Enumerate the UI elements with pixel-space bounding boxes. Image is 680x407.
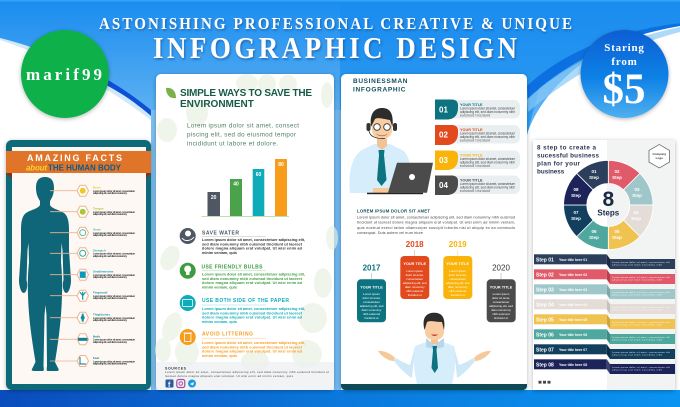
donut chart: 8 steps: Step [631,216,641,221]
text block: tincidunt ut laoreet dolore magna aliquam erat volutpat. Ut wisi enim ad minim veniam, [357,220,515,224]
row 04: 04 [439,181,448,190]
row: stomach: adipiscing elit, sed diam nonummy [93,255,128,258]
row: nails: Lorem ipsum dolor sit amet, consectetuer [93,339,135,342]
card 2018: adipiscing elit, sed [403,281,427,285]
step 06: adipiscing sed diam nonummy nibh [612,339,663,341]
step 06: Lorem ipsum dolor sit amet, consectetuer elit [612,336,670,339]
step 08: Lorem ipsum dolor sit amet, consectetuer elit [612,366,670,369]
social icons: f [168,382,171,389]
card 2017: nibh euismod [363,312,380,316]
row 02 [435,125,520,145]
step 05: Lorem ipsum dolor sit amet, consectetuer elit [612,321,670,324]
row 01: 01 [439,106,448,114]
card 2020: dolor sit amet, [492,296,510,300]
row: tongue: Lorem ipsum dolor sit amet, consectetuer [93,211,135,214]
row 03: 03 [439,156,448,165]
card 2019: adipiscing elit, sed [446,281,470,285]
icon: leaf [166,88,176,98]
bar chart [202,159,289,216]
step 07: Step 07 [536,347,554,353]
row 04: adipiscing elit, sed diam nonummy nibh [460,186,515,190]
step 08 [534,359,675,374]
social icons [166,380,196,389]
card 2018: nibh euismod [406,289,424,293]
row 01 [435,100,520,120]
intro text: incididunt ut labore et dolore. [187,140,278,148]
item: use friendly bulbs: Lorem ipsum dolor sit amet, consectetuer adipiscing elit, [202,272,305,276]
illustration: presenting man [378,313,491,384]
panel heading: SIMPLE WAYS TO SAVE THE [180,88,312,99]
panel: human body facts [6,140,151,390]
card 2019 [443,240,472,299]
text block: quis nostrud exerci tation ullamcorper suscipit lobortis nisl ut aliquip ex ea commodo [357,226,515,230]
row: brain: Lorem ipsum dolor sit amet, consectetuer [93,190,135,193]
row: brain [50,185,135,196]
row: stomach: Lorem ipsum dolor sit amet, consectetuer [93,253,135,256]
card 2018: 2018 [406,240,424,249]
step 01: Your title here 01 [559,258,587,262]
card 2018: consectetuer [406,277,423,281]
card 2018: diam nonummy [405,285,425,289]
donut chart: 8 steps: 03 [634,187,640,192]
list rows [435,100,520,195]
row 02: adipiscing elit, sed diam nonummy nibh [460,135,515,139]
card 2017: Lorem ipsum [363,292,380,296]
row: heart: adipiscing elit, sed diam nonummy [93,234,128,237]
item: use both side of the paper: minim veniam, quis [202,320,237,324]
row: tongue [50,206,135,217]
step 06: Step 06 [536,332,554,338]
step 08: adipiscing sed diam nonummy nibh [612,369,663,371]
donut chart: 8 steps: 01 [591,169,597,174]
panel: save the environment [155,74,338,390]
item: use friendly bulbs [180,263,305,289]
step 04: Your title here 04 [559,303,587,307]
row: nails [50,334,135,345]
step 01: Lorem ipsum dolor sit amet, consectetuer elit [612,261,670,264]
card 2020: YOUR TITLE [490,286,513,290]
row: feet: adipiscing elit, sed diam nonummy [93,362,128,366]
text block: Lorem ipsum dolor sit amet, consectetuer adipiscing elit, sed diam nonummy nibh euismod [357,216,515,220]
row 01: YOUR TITLE [460,103,483,107]
step 02: Step 02 [536,272,554,278]
step 02: Lorem ipsum dolor sit amet, consectetuer elit [612,276,670,279]
row: thighbones: Thighbones [93,313,110,317]
row: feet: Feet [93,356,99,360]
row 04: Lorem ipsum dolor sit amet, consectetuer [460,182,516,186]
item: use friendly bulbs: USE FRIENDLY BULBS [202,264,263,270]
step 02 [534,269,675,284]
step 01: Step 01 [536,257,554,263]
row 04 [435,176,520,195]
badge: starting price circle [580,30,668,118]
intro text: piscing elit, sed do eiusmod tempor [187,132,296,138]
donut chart: 8 steps [564,160,653,250]
bar chart: 80 [278,162,284,168]
header band [6,151,151,179]
sources [165,366,329,378]
card 2019: dolor sit amet, [449,273,467,277]
item: use both side of the paper [180,295,305,324]
row: brain: adipiscing elit, sed diam nonummy [93,192,128,195]
intro text: Lorem ipsum dolor sit amet, consect [187,122,299,130]
footer dots [538,381,550,384]
row: feet [50,356,135,366]
panel heading: business [537,168,565,176]
step 03: Lorem ipsum dolor sit amet, consectetuer elit [612,291,670,294]
sources: laoreet dolore magna aliquam erat volutpat. Ut wisi enim ad minim veniam, quis [165,374,294,378]
step 02: Your title here 02 [559,273,587,277]
row 02: YOUR TITLE [460,128,483,132]
panel heading: 8 step to create a [537,144,596,152]
row: heart [50,227,135,238]
row 01: Lorem ipsum dolor sit amet, consectetuer [460,106,516,110]
card 2020: consectetuer [493,300,509,304]
donut chart: 8 steps: Step [589,235,599,240]
donut chart: 8 steps: 02 [614,169,620,174]
row: fingernail: Lorem ipsum dolor sit amet, consectetuer [93,295,135,298]
item: save water: dolore magna aliquam erat volutpat. Ut wisi enim ad [202,247,303,251]
step list [534,254,675,374]
row 03: adipiscing elit, sed diam nonummy nibh [460,160,515,164]
text block: consequat. Duis autem vel eum iriure [357,231,423,235]
card 2017: diam nonummy [362,308,382,312]
step 01 [534,254,675,269]
row: small intestine: Lorem ipsum dolor sit amet, consectetuer [93,274,135,277]
item: use both side of the paper: sed diam nonummy nibh euismod tincidunt ut laoreet [202,311,303,315]
card 2019: diam nonummy [448,285,468,289]
step 03: adipiscing sed diam nonummy nibh [612,294,663,296]
item: avoid littering: minim veniam, quis [202,354,237,358]
item: avoid littering: dolore magna aliquam erat volutpat. Ut wisi enim ad [202,350,303,354]
card 2019: nibh euismod [449,289,467,293]
card 2017: 2017 [363,264,381,272]
card 2017: consectetuer [363,300,380,304]
icon: company logo hexagon: Logo [656,156,663,160]
row 03: Lorem ipsum dolor sit amet, consectetuer [460,157,516,161]
row: stomach [50,248,135,259]
row: fingernail [50,290,135,301]
bar chart: 60 [256,172,261,178]
card 2020: Lorem ipsum [493,292,510,296]
row 02: 02 [439,130,448,140]
row: nails: Nails [93,334,101,338]
item: save water: SAVE WATER [202,230,239,236]
row: thighbones [50,312,135,323]
item: avoid littering [180,329,305,358]
item: save water: Lorem ipsum dolor sit amet, consectetuer adipiscing elit, [202,238,305,242]
step 05 [534,314,675,329]
step 03: Your title here 03 [559,288,587,292]
badge: starting price circle: $5 [602,66,646,113]
donut chart: 8 steps: 8 [602,188,614,211]
step 08: Your title here 08 [559,363,587,367]
item: use both side of the paper: Lorem ipsum dolor sit amet, consectetuer adipiscing elit, [202,307,305,311]
icon: company logo hexagon: Company [652,152,666,156]
card 2020 [487,264,516,322]
row: tongue: Tongue [93,207,104,211]
donut chart: 8 steps: Step [571,216,581,221]
card 2017: adipiscing elit, sed [360,304,384,308]
step 01: adipiscing sed diam nonummy nibh [612,264,663,266]
donut chart: 8 steps: Step [571,193,581,198]
row: small intestine: adipiscing elit, sed diam nonummy [93,276,128,279]
panel: businessman infographic [341,74,527,390]
panel heading: ENVIRONMENT [180,99,254,110]
timeline [357,240,516,322]
row 01: adipiscing elit, sed diam nonummy nibh [460,110,515,114]
step 04: adipiscing sed diam nonummy nibh [612,309,663,311]
card 2020: 2020 [492,264,510,272]
item: avoid littering: sed diam nonummy nibh euismod tincidunt ut laoreet [202,345,303,349]
row: feet: Lorem ipsum dolor sit amet, consectetuer [93,360,135,363]
card 2018: dolor sit amet, [406,273,424,277]
panel heading: INFOGRAPHIC [353,86,406,94]
badge: starting price circle: from [611,56,638,68]
card 2019: 2019 [449,240,467,249]
card 2017: tincidunt ut [365,316,379,320]
step 07: Your title here 07 [559,348,587,352]
body silhouette [19,177,71,371]
item: avoid littering: Lorem ipsum dolor sit amet, consectetuer adipiscing elit, [202,341,305,345]
donut chart: 8 steps: 04 [633,210,639,215]
row 02: euismod tincidunt [460,138,490,142]
badge: marif99 green circle: marif99 [26,65,102,84]
donut chart: 8 steps: 07 [573,210,579,215]
card 2019: Lorem ipsum [449,269,467,273]
bar chart: 40 [233,182,239,188]
row: heart: Lorem ipsum dolor sit amet, consectetuer [93,232,135,235]
card 2020: nibh euismod [492,312,510,316]
row 04: YOUR TITLE [460,178,483,182]
step 02: adipiscing sed diam nonummy nibh [612,279,663,281]
text block [357,208,515,235]
header band: THE HUMAN BODY [48,164,122,172]
bar chart: 20 [211,195,217,201]
card 2017 [357,264,386,322]
item: avoid littering: AVOID LITTERING [202,332,253,338]
item: save water: minim veniam, quis [202,251,237,255]
row: thighbones: Lorem ipsum dolor sit amet, consectetuer [93,317,135,320]
donut chart: 8 steps: 08 [573,187,579,192]
row 03: euismod tincidunt [460,164,490,168]
title: two-line heading: ASTONISHING PROFESSIONAL CREATIVE & UNIQUE [99,15,572,33]
step 04: Step 04 [536,302,554,308]
card 2017: YOUR TITLE [360,286,383,290]
card 2017: dolor sit amet, [362,296,381,300]
card 2018: YOUR TITLE [403,262,426,266]
step 07 [534,344,675,359]
donut chart: 8 steps: Step [589,175,599,180]
text block: LOREM IPSUM DOLOR SIT AMET [357,208,430,214]
step 04: Lorem ipsum dolor sit amet, consectetuer elit [612,306,670,309]
row: fingernail: Fingernail [93,291,108,295]
row 03: YOUR TITLE [460,154,483,158]
header band: AMAZING FACTS [27,153,122,163]
item: use friendly bulbs: minim veniam, quis [202,285,237,289]
row: brain: Brain [93,186,101,190]
step 08: Step 08 [536,362,554,368]
card 2018 [400,240,429,299]
card 2019: tincidunt ut [451,293,465,297]
row: small intestine [50,269,135,280]
badge: starting price circle: Staring [604,42,645,54]
item: use both side of the paper: dolore magna aliquam erat volutpat. Ut wisi enim ad [202,316,303,320]
step 07: adipiscing sed diam nonummy nibh [612,354,663,356]
step 03 [534,284,675,299]
step 07: Lorem ipsum dolor sit amet, consectetuer elit [612,351,670,354]
panel: 8 step business plan [533,140,675,390]
item: use both side of the paper: USE BOTH SIDE OF THE PAPER [202,298,289,304]
step 03: Step 03 [536,287,554,293]
row 03 [435,150,520,170]
row 01: euismod tincidunt [460,114,490,118]
step 04 [534,299,675,314]
decorative leaves [155,74,338,371]
row: thighbones: adipiscing elit, sed diam nonummy [93,319,128,322]
illustration: businessman at laptop [349,108,433,194]
step 05: Step 05 [536,317,554,323]
title: two-line heading [99,15,572,65]
icon: company logo hexagon [649,144,670,168]
panel heading: BUSINESSMAN [353,78,408,85]
donut chart: 8 steps: Step [612,175,622,180]
step 05: adipiscing sed diam nonummy nibh [612,324,663,326]
card 2018: tincidunt ut [408,293,422,297]
card 2020: adipiscing elit, sed [489,304,513,308]
donut chart: 8 steps: Step [632,193,642,198]
row: small intestine: Smallintestine [93,270,114,274]
item: use friendly bulbs: dolore magna aliquam erat volutpat. Ut wisi enim ad [202,281,303,285]
fact rows [50,185,135,366]
header band: about [26,164,47,172]
card 2019: consectetuer [449,277,466,281]
step 06: Your title here 06 [559,333,587,337]
title: two-line heading: INFOGRAPHIC DESIGN [153,31,517,65]
item: use friendly bulbs: sed diam nonummy nibh euismod tincidunt ut laoreet [202,277,303,281]
step 06 [534,329,675,344]
donut chart: 8 steps: 06 [591,229,597,234]
row 04: euismod tincidunt [460,189,490,193]
card 2020: tincidunt ut [494,316,508,320]
badge: marif99 green circle [21,30,109,118]
card 2020: diam nonummy [491,308,511,312]
row 02: Lorem ipsum dolor sit amet, consectetuer [460,132,516,136]
row: stomach: Stomach [93,248,106,252]
panel heading: sucessful business [537,152,599,160]
row: fingernail: adipiscing elit, sed diam nonummy [93,297,128,300]
item: save water: sed diam nonummy nibh euismod tincidunt ut laoreet [202,242,303,246]
donut chart: 8 steps: Steps [597,208,620,218]
card 2018: Lorem ipsum [406,269,424,273]
donut chart: 8 steps: Step [612,235,622,240]
step 05: Your title here 05 [559,318,587,322]
sources: Lorem ipsum dolor sit amet, consectetuer adipiscing elit, sed diam nonummy nibh euismod tincidunt ut [165,370,329,374]
sources: SOURCES [165,366,187,370]
item: save water [180,228,305,255]
donut chart: 8 steps: 05 [614,229,620,234]
row: tongue: adipiscing elit, sed diam nonummy [93,213,128,216]
row: heart: Heart [93,228,101,232]
panel heading: plan for your [537,160,581,168]
card 2019: YOUR TITLE [446,262,469,266]
row: nails: adipiscing elit, sed diam nonummy [93,341,128,344]
